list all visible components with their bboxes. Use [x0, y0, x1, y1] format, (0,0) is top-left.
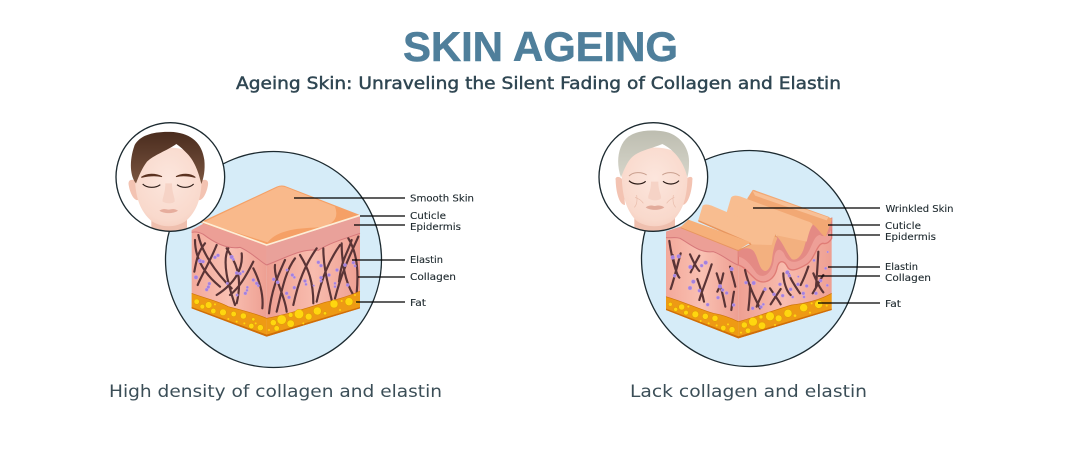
labels: young skin: Fat — [410, 298, 426, 309]
infographic canvas — [110, 32, 953, 400]
panel: aged skin — [599, 123, 858, 366]
portrait: older woman — [599, 123, 708, 235]
caption: young skin: High density of collagen and elastin — [109, 382, 442, 402]
skin cross-section: smooth — [192, 186, 360, 337]
labels: young skin: Epidermis — [410, 222, 461, 233]
labels: aged skin: Collagen — [885, 273, 931, 284]
fat layer — [666, 297, 738, 338]
labels: aged skin: Elastin — [885, 262, 918, 273]
portrait: young woman — [116, 123, 225, 235]
elastin dots — [194, 254, 356, 299]
orange front folds — [738, 234, 777, 271]
caption: aged skin: Lack collagen and elastin — [630, 382, 867, 402]
collagen fibres — [194, 235, 358, 313]
labels: young skin — [294, 194, 474, 309]
collagen fibres — [669, 241, 823, 310]
labels: young skin: Smooth Skin — [410, 194, 474, 204]
fat layer — [192, 293, 267, 337]
panel: young skin — [116, 123, 381, 368]
blue background circle — [642, 150, 858, 366]
title: SKIN AGEING — [403, 23, 678, 70]
labels: aged skin: Cuticle — [885, 221, 921, 232]
top surface — [200, 186, 360, 245]
wrinkle ridges — [747, 190, 832, 237]
subtitle: Ageing Skin: Unraveling the Silent Fading of Collagen and Elastin — [236, 74, 841, 94]
labels: young skin: Elastin — [410, 255, 443, 266]
labels: aged skin: Wrinkled Skin — [886, 204, 954, 215]
skin cross-section: wrinkled — [666, 190, 832, 338]
labels: aged skin — [753, 204, 954, 310]
labels: young skin: Collagen — [410, 272, 456, 283]
labels: young skin: Cuticle — [410, 211, 446, 222]
labels: aged skin: Epidermis — [885, 232, 936, 243]
epidermis band following the wrinkles — [738, 218, 832, 282]
labels: aged skin: Fat — [885, 299, 901, 310]
elastin dots — [671, 251, 829, 310]
blue background circle — [166, 152, 382, 368]
